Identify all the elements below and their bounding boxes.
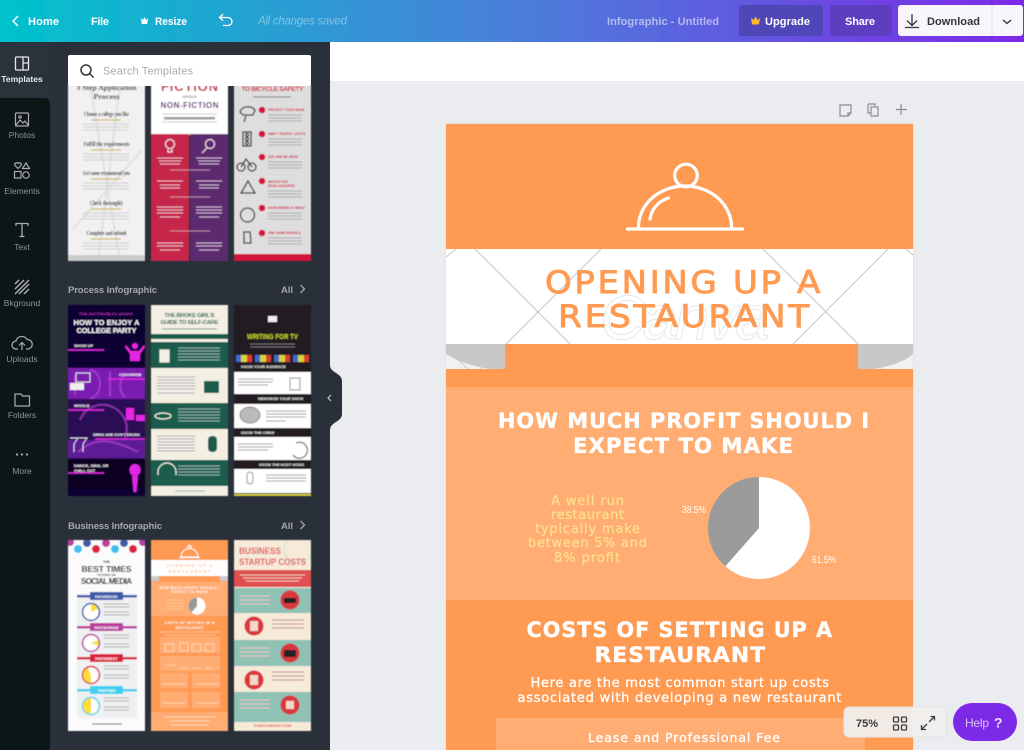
icon: duplicate (868, 104, 878, 116)
help button: ? (994, 714, 1003, 730)
white toolbar strip (330, 42, 1024, 81)
thumbnail: college party (68, 305, 145, 496)
thumbnail: college application: Get some recommend you (83, 171, 130, 177)
icon: add page (896, 104, 907, 115)
templates tab (1, 57, 43, 84)
thumbnail: best times social media: FACEBOOK (95, 594, 118, 599)
help button (953, 703, 1017, 741)
uploads tab: Uploads (6, 354, 38, 364)
costs heading: COSTS OF SETTING UP A (526, 618, 833, 642)
heading: process infographic: All (281, 285, 293, 296)
costs heading: RESTAURANT (594, 643, 766, 667)
thumbnail: best times social media: PINTEREST (95, 656, 118, 661)
folders tab: Folders (8, 410, 36, 420)
thumbnail: college party: DRINK AND DON'T DRUNK (93, 432, 140, 437)
thumbnail: bicycle safety: PROTECT YOUR HEAD (268, 108, 305, 112)
share button (830, 5, 892, 36)
thumbnail: college application: Process (94, 92, 120, 101)
heading: process infographic: Process Infographic (68, 285, 157, 296)
save status: All changes saved (257, 16, 348, 28)
thumbnail: college party: CHILL OUT (74, 468, 96, 473)
thumbnail: writing for tv: WRITING FOR TV (247, 334, 298, 341)
thumbnail: writing for tv (234, 305, 311, 496)
elements tab (4, 163, 40, 196)
icon: undo (220, 14, 232, 26)
profit description (528, 494, 647, 566)
back chevron and home: Home (28, 16, 59, 28)
profit description: typically make (535, 522, 640, 537)
profit description: A well run (551, 494, 624, 509)
thumbnail: business startup costs (234, 535, 312, 731)
top navigation bar (0, 0, 1024, 42)
thumbnail: college party: MINGLE (74, 403, 90, 408)
thumbnail: bicycle safety (234, 85, 311, 261)
download button: Download (927, 16, 980, 28)
thumbnail: best times social media (66, 538, 147, 731)
thumbnail: bicycle safety: AVOID RIDING AT NIGHT (268, 206, 305, 210)
pie chart: 38.5% (682, 505, 706, 516)
profit heading: HOW MUCH PROFIT SHOULD I (498, 409, 870, 433)
templates tab: Templates (1, 74, 43, 84)
thumbnail: fiction versus non-fiction: NON-FICTION (160, 101, 219, 110)
canvas background (330, 81, 1024, 750)
ribbon fold shadows (446, 344, 913, 369)
more tab: More (12, 466, 32, 476)
uploads tab (6, 337, 38, 364)
thumbnail: bicycle safety: TO BICYCLE SAFETY (242, 86, 304, 93)
infographic page (445, 123, 914, 750)
costs description (518, 676, 842, 706)
icon: note (840, 105, 851, 116)
collapse handle (328, 365, 342, 430)
thumbnail: writing for tv: KNOW YOUR AUDIENCE (241, 365, 286, 369)
title text: OPENING UP A (545, 265, 823, 301)
background tab (4, 280, 40, 308)
profit description: between 5% and (528, 536, 647, 551)
search box (68, 55, 311, 86)
thumbnail: best times social media: SOCIAL MEDIA (81, 577, 132, 586)
title ribbon (446, 249, 913, 369)
thumbnail: business startup costs: BUSINESS (239, 546, 281, 557)
thumbnail: bicycle safety: WATCH FOR (268, 180, 288, 184)
thumbnail: college application: Choose a college you like (84, 112, 129, 118)
zoom controls: 75% (856, 718, 878, 730)
text tab (14, 224, 30, 252)
thumbnail: self-care guide: THE BROKE GIRL'S (164, 313, 215, 319)
thumbnail: opening a restaurant: OPENING UP A (166, 563, 213, 568)
heading: business infographic (68, 521, 304, 532)
lease and professional fee box: Lease and Professional Fee (588, 730, 780, 745)
back chevron and home (13, 16, 59, 28)
pie chart: 61.5% (812, 555, 836, 566)
thumbnail: college application: Fulfill the requirements (84, 142, 130, 148)
thumbnail: college party: CONVERSE (119, 372, 142, 377)
help button: Help (965, 716, 989, 730)
background tab: Bkground (4, 298, 40, 308)
share button: Share (845, 16, 875, 28)
heading: process infographic (68, 285, 304, 296)
elements tab: Elements (4, 186, 40, 196)
thumbnail: college party: COLLEGE PARTY (76, 326, 136, 335)
thumbnail: writing for tv: MEMORIZE YOUR SHOW (258, 397, 304, 401)
profit description: restaurant (551, 508, 624, 523)
thumbnail: college application: 3 Step Application (76, 83, 137, 92)
thumbnail: best times social media: BEST TIMES (82, 564, 132, 574)
heading: business infographic: All (281, 521, 293, 532)
thumbnail: opening a restaurant (151, 540, 228, 731)
upgrade button: Upgrade (765, 16, 810, 28)
costs section (446, 600, 913, 750)
text tab: Text (14, 242, 30, 252)
pie chart (682, 477, 836, 579)
resize menu (141, 16, 187, 28)
template thumbnails row 2 (68, 305, 311, 496)
thumbnail: college application (68, 83, 145, 261)
thumbnail: opening a restaurant: COSTS OF SETTING UP A (164, 621, 215, 625)
thumbnail: opening a restaurant: RESTAURANT (168, 569, 211, 574)
thumbnail: bicycle safety: OBEY TRAFFIC LIGHTS (268, 132, 306, 136)
costs description: Here are the most common start up costs (530, 676, 829, 691)
thumbnail: bicycle safety: USE HAND SIGNALS (268, 231, 302, 235)
thumbnail: opening a restaurant: RESTAURANT (176, 626, 204, 630)
template panel (50, 42, 330, 750)
download button (898, 5, 1023, 36)
thumbnail: fiction versus non-fiction: VERSUS (182, 95, 197, 99)
thumbnail: writing for tv: KNOW THE CREW (241, 431, 275, 435)
thumbnail: college party: DANCE, SING, OR (74, 463, 109, 468)
thumbnail: best times social media: THE (103, 560, 111, 564)
more tab (12, 453, 32, 476)
costs description: associated with developing a new restaurant (518, 691, 842, 706)
icon: serving cloche (628, 164, 742, 229)
search box: Search Templates (103, 66, 194, 78)
profit heading (498, 409, 870, 458)
header block (446, 124, 913, 249)
orange ribbon tail (446, 344, 913, 387)
thumbnail: best times social media: INSTAGRAM (95, 625, 119, 630)
profit section (446, 387, 913, 600)
resize menu: Resize (155, 16, 187, 28)
thumbnail: fiction versus non-fiction (151, 79, 228, 261)
thumbnail: self-care guide: GUIDE TO SELF-CARE (160, 320, 219, 326)
thumbnail: bicycle safety: ROAD HAZARDS (268, 184, 296, 188)
thumbnail: college party: SHOW UP (74, 343, 93, 348)
thumbnail: college party: HOW TO ENJOY A (74, 318, 140, 327)
thumbnail: self-care guide (151, 305, 228, 496)
thumbnail: fiction versus non-fiction: FICTION (161, 79, 218, 94)
profit heading: EXPECT TO MAKE (573, 434, 794, 458)
heading: business infographic: Business Infographic (68, 521, 162, 532)
thumbnail: college party: Pete and Friendly Co. present (79, 311, 133, 316)
thumbnail: bicycle safety: SEE AND BE SEEN (268, 155, 299, 159)
zoom controls (844, 707, 946, 737)
photos tab: Photos (9, 130, 35, 140)
thumbnail: writing for tv: KNOW THE HOST HOWS (259, 463, 305, 467)
file menu: File (91, 16, 109, 28)
template thumbnails row 3 (66, 535, 312, 731)
profit description: 8% profit (554, 551, 620, 566)
watermark: Canva (600, 284, 770, 353)
left sidebar (0, 42, 50, 750)
thumbnail: business startup costs: STARTUP COSTS (239, 557, 306, 568)
title text (545, 265, 823, 335)
thumbnail: college application: Check thoroughly (90, 201, 123, 207)
costs heading (526, 618, 833, 667)
thumbnail: opening a restaurant: HOW MUCH PROFIT SHOULD I (160, 586, 220, 590)
thumbnail: college application: Complete and submit (86, 231, 126, 237)
document title: Infographic - Untitled (607, 16, 719, 28)
thumbnail: business startup costs: STARTUPBUDDY.COM (254, 724, 291, 728)
toolbar icons above page (840, 104, 907, 116)
thumbnail: opening a restaurant: EXPECT TO MAKE (172, 590, 208, 594)
thumbnail: best times social media: TWITTER (98, 688, 115, 693)
photos tab (9, 113, 35, 140)
title text: RESTAURANT (558, 299, 812, 335)
thumbnail: best times social media: TO POST ON (97, 573, 116, 577)
upgrade button (739, 5, 823, 36)
folders tab (8, 394, 36, 420)
template thumbnails row 1 (68, 79, 311, 261)
lease and professional fee box (496, 718, 865, 750)
